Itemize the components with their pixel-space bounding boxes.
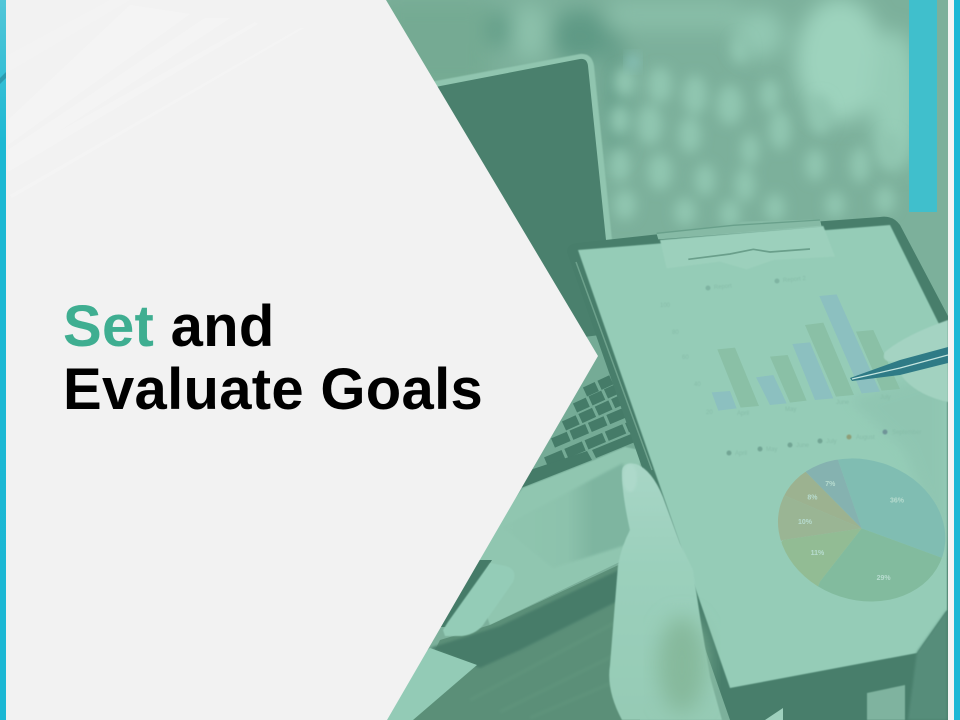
bright edge of clipboard	[576, 262, 652, 470]
right hand fingers	[884, 320, 948, 402]
palm shading	[658, 617, 706, 713]
chart legends and axis labels: 40	[694, 382, 701, 388]
chart legends and axis labels: July	[826, 439, 837, 445]
chart legends and axis labels: June	[836, 400, 850, 406]
laptop screen	[434, 54, 612, 337]
chart legends and axis labels: June	[796, 443, 810, 449]
white chevron panel	[0, 0, 598, 720]
left hand holding clipboard	[609, 464, 722, 720]
clipboard clip	[656, 220, 826, 260]
paper sheet on desk	[380, 648, 477, 720]
chart legends and axis labels: 80	[672, 330, 679, 336]
pie chart on paper: 36%	[890, 498, 905, 505]
accent bar top right	[909, 0, 937, 212]
right frame strip cyan	[954, 0, 960, 720]
paper on clipboard	[578, 225, 947, 688]
chart legends and axis labels: April	[735, 451, 747, 457]
sleeve and desk items bottom right	[765, 610, 947, 720]
laptop keyboard	[522, 336, 634, 488]
faint diagonal light streaks	[8, 0, 304, 198]
thumb nail	[626, 483, 634, 488]
title: Set and	[63, 294, 275, 359]
pie chart on paper: 7%	[825, 481, 836, 488]
right frame strip white	[948, 0, 955, 720]
chart legends and axis labels: May	[785, 407, 796, 413]
chart legends and axis labels: August	[856, 435, 875, 441]
pie chart on paper: 11%	[811, 550, 825, 557]
chart legends and axis labels	[706, 278, 888, 456]
background photo	[380, 0, 960, 720]
phone on desk	[441, 560, 492, 636]
pie chart on paper: 10%	[798, 519, 813, 526]
left frame strip	[0, 0, 6, 720]
chart legends and axis labels: May	[766, 447, 777, 453]
bar chart on paper	[712, 294, 900, 411]
blurred background bokeh	[380, 0, 919, 228]
chart legends and axis labels: April	[737, 411, 749, 417]
paper shading lower right	[947, 401, 948, 553]
pie chart on paper: 29%	[877, 575, 891, 582]
chart legends and axis labels: Report	[714, 283, 732, 291]
pen	[850, 347, 948, 381]
wooden desk	[413, 566, 640, 720]
chart legends and axis labels: 60	[682, 355, 689, 361]
title: Evaluate Goals	[63, 357, 483, 422]
pie chart on paper: 8%	[807, 494, 818, 501]
clipboard board	[567, 217, 948, 720]
title	[63, 294, 483, 422]
pie chart on paper	[778, 458, 946, 602]
chart legends and axis labels: July	[880, 395, 891, 401]
chart legends and axis labels: September	[892, 430, 921, 436]
chart legends and axis labels: Report 2	[783, 276, 807, 284]
chart legends and axis labels: 100	[660, 303, 671, 309]
chart legends and axis labels: 20	[706, 410, 713, 416]
laptop deck and trackpad	[470, 447, 640, 628]
